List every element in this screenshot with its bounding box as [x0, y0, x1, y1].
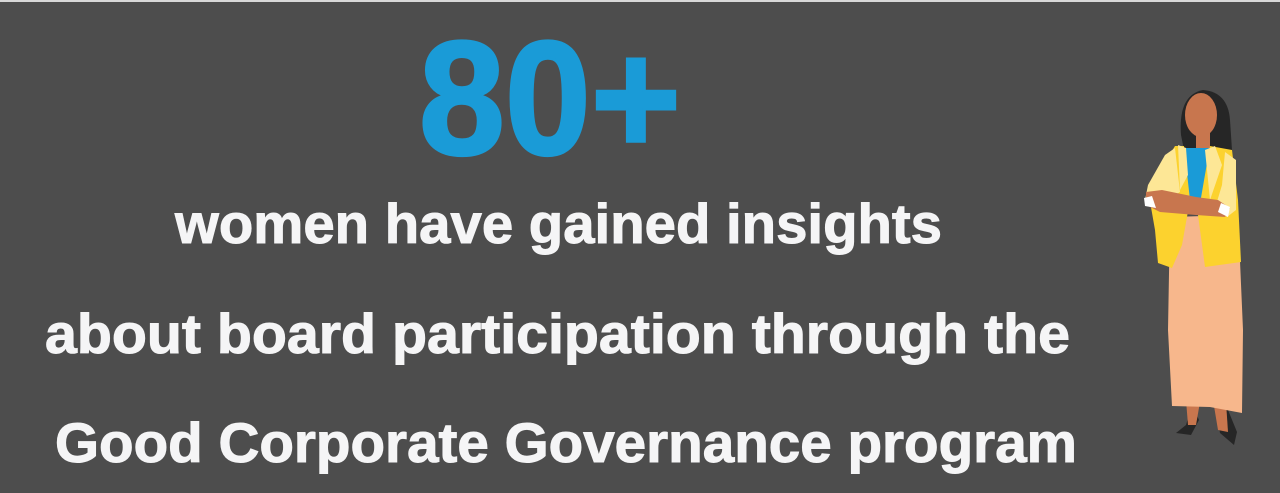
skirt — [1168, 215, 1243, 413]
hair — [1181, 90, 1232, 160]
legs — [1186, 400, 1200, 425]
illustration: woman with crossed arms — [1144, 90, 1243, 445]
sleeves — [1145, 148, 1180, 205]
headline number: 80+ — [419, 8, 681, 189]
neck and face — [1196, 128, 1210, 148]
text block: description: women have gained insights — [174, 192, 942, 255]
blue top — [1182, 148, 1212, 198]
arms crossed — [1146, 190, 1230, 217]
jacket — [1148, 146, 1190, 268]
text block: description: about board participation through the — [45, 302, 1070, 365]
text block: description — [45, 192, 1077, 474]
text block: description: Good Corporate Governance program — [55, 411, 1077, 474]
shoes — [1176, 405, 1199, 435]
